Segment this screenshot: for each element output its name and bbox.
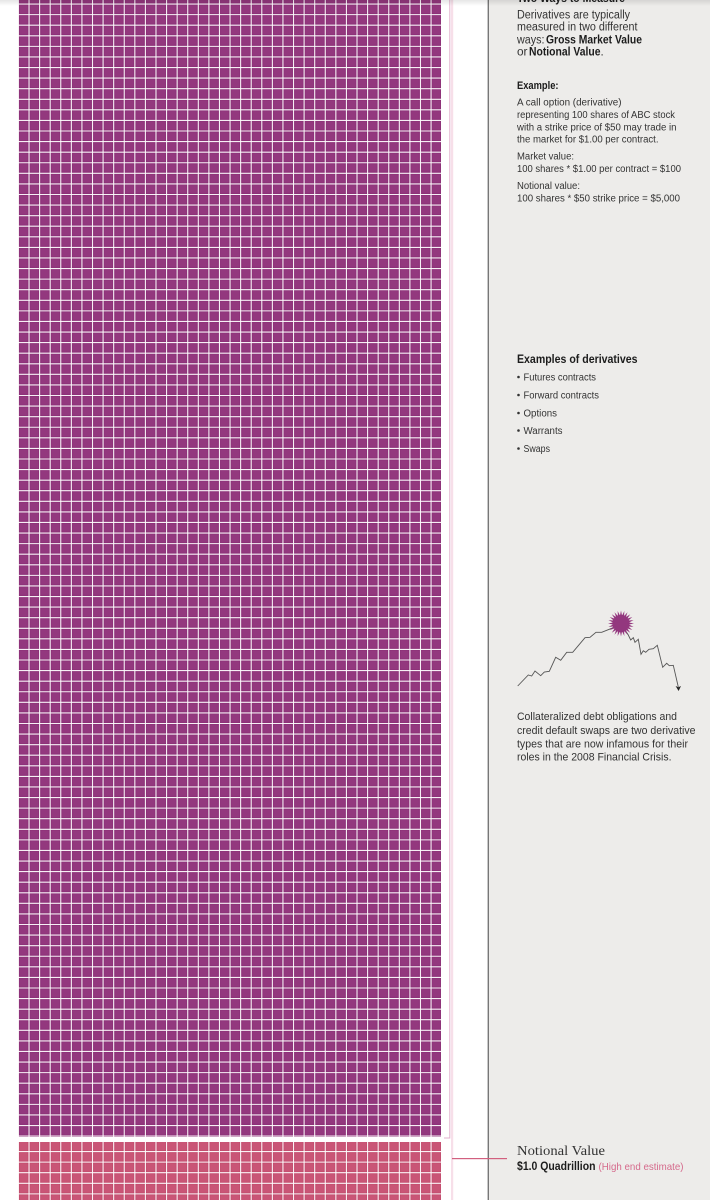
label: notional value: (High end estimate): [598, 1161, 684, 1173]
list: derivative types: Warrants: [524, 426, 563, 437]
list: derivative types: Futures contracts: [524, 372, 596, 384]
top edge shadow: [0, 0, 710, 6]
icon: purple burst: [608, 610, 634, 636]
text block: example: Example:: [517, 80, 558, 92]
text block: measurement intro: measured in two different: [517, 22, 638, 34]
label: notional value: Notional Value: [517, 1144, 605, 1159]
icon: arrow head: [676, 686, 681, 691]
text block: example: A call option (derivative): [517, 97, 622, 108]
text block: example: with a strike price of $50 may trade in: [516, 122, 676, 134]
bracket: span of the purple grid: [444, 0, 453, 1200]
text block: example: representing 100 shares of ABC stock: [517, 110, 675, 121]
text block: example: 100 shares * $1.00 per contract = $100: [517, 164, 682, 175]
text block: example: Notional value:: [517, 181, 580, 192]
label: notional value: [517, 1144, 684, 1173]
list: derivative types: Options: [524, 408, 557, 420]
text block: financial crisis note: [517, 711, 696, 764]
panel: sidebar background: [488, 0, 710, 1200]
list: derivative types: Swaps: [524, 444, 550, 455]
grid: notional value squares in pink: [18, 1142, 441, 1200]
text block: measurement intro: .: [600, 47, 604, 59]
list: derivative types: Forward contracts: [524, 390, 599, 402]
text block: measurement intro: [516, 9, 642, 59]
leader line: notional value: [452, 1158, 507, 1159]
text block: financial crisis note: Collateralized debt obligations and: [517, 711, 677, 723]
grid: gross market value squares in purple: [10, 0, 450, 1145]
text block: example: Market value:: [517, 152, 574, 163]
text block: measurement intro: ways:: [516, 34, 544, 46]
text block: financial crisis note: credit default swaps are two derivative: [517, 725, 696, 737]
text block: measurement intro: Gross Market Value: [546, 34, 642, 46]
label: notional value: $1.0 Quadrillion: [517, 1161, 596, 1173]
text block: financial crisis note: types that are now infamous for their: [517, 738, 688, 750]
text block: measurement intro: or: [517, 47, 528, 59]
text block: example: [516, 80, 682, 204]
list: derivative types: [517, 372, 599, 455]
text block: example: the market for $1.00 per contract.: [517, 135, 658, 146]
text block: measurement intro: Notional Value: [529, 47, 600, 59]
chart: market rise and crash line: [518, 624, 681, 691]
text block: measurement intro: Derivatives are typically: [517, 9, 630, 21]
text block: example: 100 shares * $50 strike price = $5,000: [517, 193, 681, 204]
text block: financial crisis note: roles in the 2008 Financial Crisis.: [517, 752, 672, 764]
heading: examples of derivatives: Examples of derivatives: [517, 352, 638, 366]
